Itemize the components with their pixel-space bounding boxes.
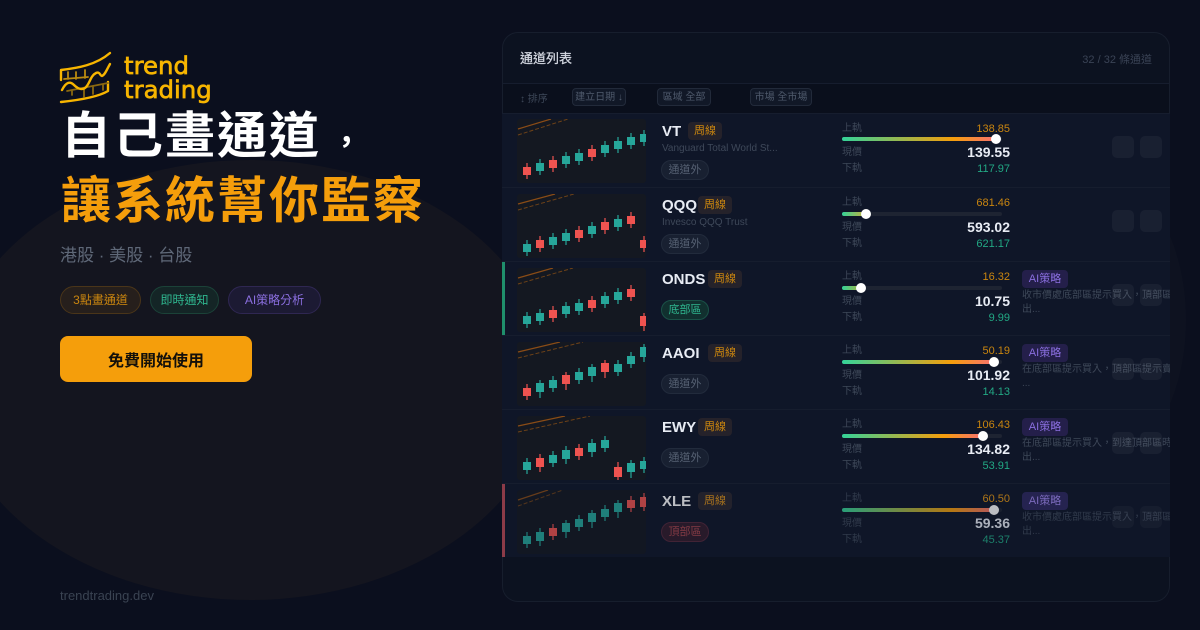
progress thumb [861, 209, 871, 219]
pill: 3 point channel: 3點畫通道 [73, 293, 128, 307]
row: XLE [502, 483, 1170, 557]
upper rail value: 106.43 [976, 419, 1010, 431]
action button [1140, 506, 1162, 528]
feature pills [60, 286, 321, 314]
price label: 現價 [842, 444, 862, 455]
status pill [661, 234, 709, 254]
title [61, 108, 425, 229]
background glow: right ellipse [1000, 170, 1186, 470]
AI strategy tag [1022, 492, 1068, 510]
AI strategy tag [1022, 270, 1068, 288]
AI strategy text [1022, 289, 1170, 315]
progress fill [842, 286, 861, 290]
lower rail value: 14.13 [982, 386, 1010, 398]
progress track [842, 360, 1002, 364]
pill: instant notification [150, 286, 219, 314]
AI strategy tag [1022, 344, 1068, 362]
upper rail value: 138.85 [976, 123, 1010, 135]
price label: 現價 [842, 296, 862, 307]
progress track [842, 286, 1002, 290]
progress thumb [989, 357, 999, 367]
AI strategy text [1022, 511, 1170, 537]
action button [1112, 432, 1134, 454]
top zone accent bar [502, 484, 505, 559]
ticker: AAOI: AAOI [662, 345, 700, 362]
panel heading: 通道列表 [520, 51, 572, 66]
background glow: left ellipse [0, 160, 550, 600]
current price: 59.36 [975, 515, 1010, 531]
logo [60, 51, 212, 104]
progress fill [842, 137, 996, 141]
upper rail value: 681.46 [976, 197, 1010, 209]
icon: channel chart logo [60, 52, 112, 104]
action button [1140, 210, 1162, 232]
ticker: EWY: EWY [662, 419, 696, 436]
upper rail value: 16.32 [982, 271, 1010, 283]
status pill: bottom zone [661, 300, 709, 320]
upper rail value: 50.19 [982, 345, 1010, 357]
status pill [661, 160, 709, 180]
progress track [842, 137, 1002, 141]
subtitle: 港股 · 美股 · 台股 [60, 246, 192, 265]
action button [1140, 432, 1162, 454]
lower rail value: 117.97 [977, 163, 1010, 175]
upper rail label: 上軌 [842, 271, 862, 282]
lower rail label: 下軌 [842, 460, 862, 471]
row: AAOI [502, 335, 1170, 409]
status pill: 通道外 [668, 452, 702, 464]
filter: zone: 區域 全部 [663, 92, 705, 103]
progress track [842, 508, 1002, 512]
timeframe tag [708, 270, 742, 288]
filter bar [503, 83, 1171, 114]
channel count: 32 / 32 條通道 [1082, 54, 1152, 66]
candlestick chart: QQQ [517, 194, 646, 258]
filter: market: 市場 全市場 [755, 92, 807, 103]
fund name: Vanguard Total World St... [662, 143, 778, 154]
fund name: Invesco QQQ Trust [662, 217, 748, 228]
AI strategy text: 出... [1022, 304, 1040, 315]
row: ONDS [502, 261, 1170, 335]
sort label: ↕ 排序 [520, 94, 548, 105]
AI strategy text [1022, 363, 1170, 389]
timeframe tag: 周線 [704, 421, 726, 433]
current price: 134.82 [967, 441, 1010, 457]
price label: 現價 [842, 518, 862, 529]
pill: 3 point channel [60, 286, 141, 314]
status pill [661, 374, 709, 394]
progress fill [842, 434, 983, 438]
lower rail value: 53.91 [982, 460, 1010, 472]
progress track [842, 212, 1002, 216]
filter: market [750, 88, 812, 106]
filter: date: 建立日期 ↓ [575, 92, 623, 103]
progress fill [842, 360, 994, 364]
candlestick chart: ONDS [517, 268, 646, 332]
timeframe tag: 周線 [694, 125, 716, 137]
timeframe tag [698, 418, 732, 436]
AI strategy tag [1022, 418, 1068, 436]
upper rail label: 上軌 [842, 493, 862, 504]
current price: 139.55 [967, 144, 1010, 160]
action button [1112, 506, 1134, 528]
AI strategy text [1022, 437, 1170, 463]
lower rail label: 下軌 [842, 312, 862, 323]
ticker: QQQ: QQQ [662, 197, 697, 214]
lower rail label: 下軌 [842, 534, 862, 545]
upper rail label: 上軌 [842, 197, 862, 208]
timeframe tag [688, 122, 722, 140]
call to action button: 免費開始使用 [108, 353, 204, 370]
candlestick chart: AAOI [517, 342, 646, 406]
logo wordmark: trend [124, 51, 189, 80]
timeframe tag [698, 196, 732, 214]
AI strategy text: 出... [1022, 452, 1040, 463]
upper rail label: 上軌 [842, 345, 862, 356]
upper rail label: 上軌 [842, 419, 862, 430]
call to action button [60, 336, 252, 382]
AI strategy text: 出... [1022, 526, 1040, 537]
ticker: ONDS: ONDS [662, 271, 705, 288]
price label: 現價 [842, 147, 862, 158]
current price: 593.02 [967, 219, 1010, 235]
lower rail value: 621.17 [976, 238, 1010, 250]
status pill: top zone: 頂部區 [668, 526, 702, 538]
progress thumb [991, 134, 1001, 144]
current price: 10.75 [975, 293, 1010, 309]
AI strategy tag: AI策略 [1029, 347, 1061, 359]
logo wordmark [124, 51, 212, 104]
candlestick chart: EWY [517, 416, 646, 480]
action button [1112, 136, 1134, 158]
action button [1140, 136, 1162, 158]
status pill: bottom zone: 底部區 [668, 304, 702, 316]
timeframe tag [698, 492, 732, 510]
AI strategy tag: AI策略 [1029, 421, 1061, 433]
action button [1112, 284, 1134, 306]
status pill: 通道外 [668, 238, 702, 250]
lower rail label: 下軌 [842, 163, 862, 174]
lower rail label: 下軌 [842, 386, 862, 397]
AI strategy text: ... [1022, 378, 1030, 389]
status pill: 通道外 [668, 378, 702, 390]
AI strategy tag: AI策略 [1029, 495, 1061, 507]
pill: AI strategy: AI策略分析 [245, 293, 304, 307]
timeframe tag: 周線 [704, 199, 726, 211]
timeframe tag [708, 344, 742, 362]
title line 2: 讓系統幫你監察 [61, 173, 425, 229]
status pill: 通道外 [668, 164, 702, 176]
row: EWY [502, 409, 1170, 483]
candlestick chart: XLE [517, 490, 646, 554]
ticker: VT: VT [662, 123, 681, 140]
ticker: XLE: XLE [662, 493, 691, 510]
progress fill [842, 508, 994, 512]
filter: zone [657, 88, 711, 106]
price label: 現價 [842, 370, 862, 381]
logo wordmark: trading [124, 75, 212, 104]
action button [1140, 358, 1162, 380]
current price: 101.92 [967, 367, 1010, 383]
lower rail value: 9.99 [989, 312, 1010, 324]
upper rail value: 60.50 [982, 493, 1010, 505]
panel: channel list [502, 32, 1170, 602]
action button [1140, 284, 1162, 306]
upper rail label: 上軌 [842, 123, 862, 134]
lower rail label: 下軌 [842, 238, 862, 249]
footer url: trendtrading.dev [60, 588, 154, 603]
timeframe tag: 周線 [714, 347, 736, 359]
progress fill [842, 212, 866, 216]
pill: instant notification: 即時通知 [160, 293, 208, 307]
status pill: top zone [661, 522, 709, 542]
filter: date [572, 88, 626, 106]
candlestick chart: VT [517, 119, 646, 183]
title line 1: 自己畫通道 ， [61, 108, 364, 164]
progress thumb [978, 431, 988, 441]
action button [1112, 358, 1134, 380]
faded row content [518, 490, 1170, 548]
pill: AI strategy [228, 286, 321, 314]
row: QQQ [502, 187, 1170, 261]
action button [1112, 210, 1134, 232]
timeframe tag: 周線 [704, 495, 726, 507]
lower rail value: 45.37 [982, 534, 1010, 546]
row: VT [502, 113, 1170, 187]
bottom zone accent bar [502, 262, 505, 337]
progress track [842, 434, 1002, 438]
progress thumb [989, 505, 999, 515]
status pill [661, 448, 709, 468]
progress thumb [856, 283, 866, 293]
AI strategy tag: AI策略 [1029, 273, 1061, 285]
price label: 現價 [842, 222, 862, 233]
timeframe tag: 周線 [714, 273, 736, 285]
